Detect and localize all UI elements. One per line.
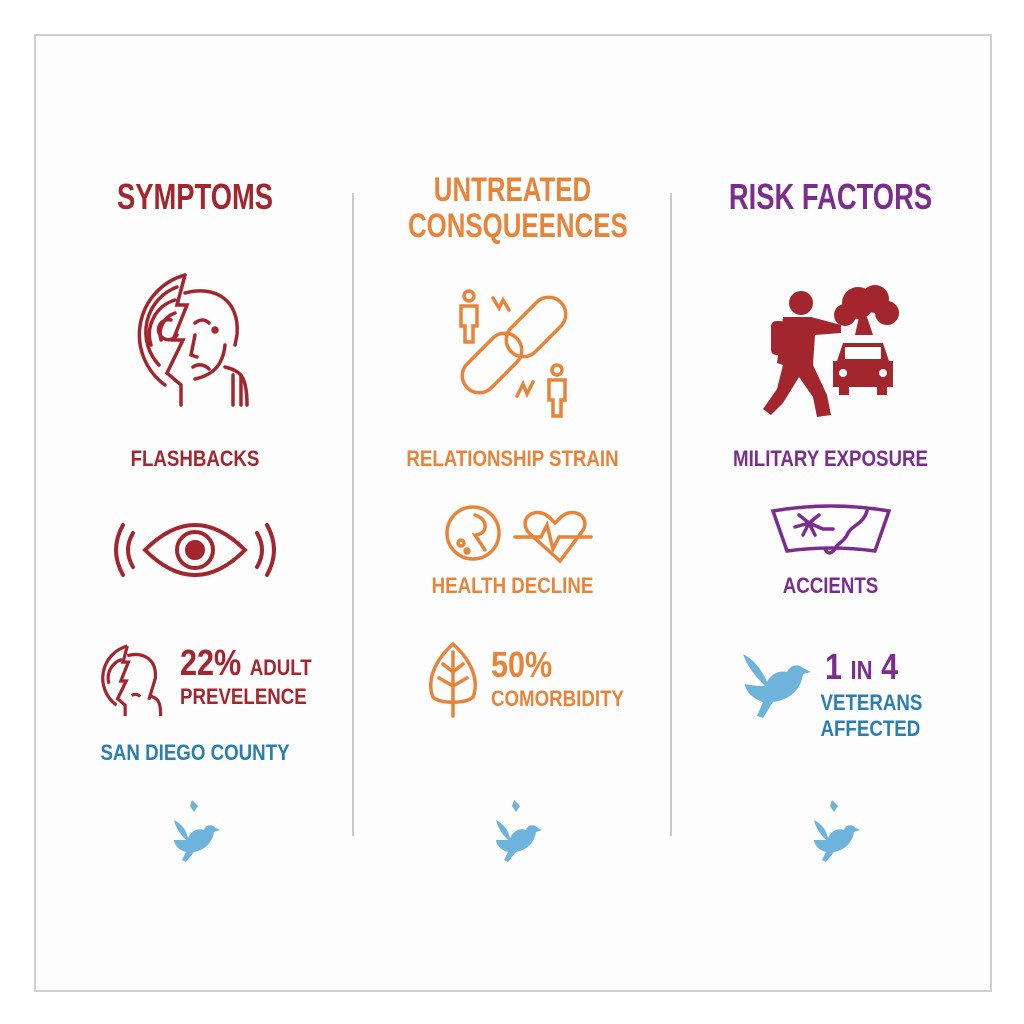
label: accidents: ACCIENTS	[783, 573, 878, 598]
heading: untreated consequences	[408, 171, 628, 245]
panel: consequences	[406, 171, 628, 718]
heading: risk factors: RISK FACTORS	[729, 176, 932, 217]
stat: 50% comorbidity	[429, 642, 624, 718]
icon: eye	[114, 522, 276, 578]
label: relationship strain: RELATIONSHIP STRAIN	[406, 446, 619, 471]
panel: symptoms	[100, 176, 312, 765]
label: flashbacks: FLASHBACKS	[131, 446, 259, 471]
icon: cracked windshield	[770, 504, 892, 555]
label: health decline: HEALTH DECLINE	[432, 573, 593, 598]
heading: symptoms: SYMPTOMS	[117, 176, 273, 217]
icon: soldier and explosion	[763, 285, 899, 417]
stat: 50% comorbidity: COMORBIDITY	[491, 686, 624, 711]
label: military exposure: MILITARY EXPOSURE	[733, 446, 928, 471]
stat: 1 in 4 veterans: 1 IN 4	[825, 646, 898, 687]
heading: untreated consequences: CONSQUEENCES	[408, 207, 628, 245]
stat: 1 in 4 veterans: VETERANS	[820, 690, 922, 715]
label: san diego county: SAN DIEGO COUNTY	[100, 740, 290, 765]
icon: doves footer	[174, 800, 860, 862]
stat: 22% adult prevalence: 22% ADULT	[180, 642, 312, 683]
stat: 1 in 4 veterans	[743, 646, 922, 741]
stat: 22% adult prevalence: PREVELENCE	[180, 684, 307, 709]
heading: untreated consequences: UNTREATED	[434, 171, 591, 209]
icon: fractured head	[138, 273, 249, 407]
stat: 1 in 4 veterans: AFFECTED	[820, 716, 920, 741]
icon: health	[445, 505, 593, 564]
stat: 22% adult prevalence	[101, 642, 312, 716]
panel: risk factors	[729, 176, 932, 741]
stat: 50% comorbidity: 50%	[491, 644, 552, 685]
icon: broken chain with people	[459, 289, 568, 418]
